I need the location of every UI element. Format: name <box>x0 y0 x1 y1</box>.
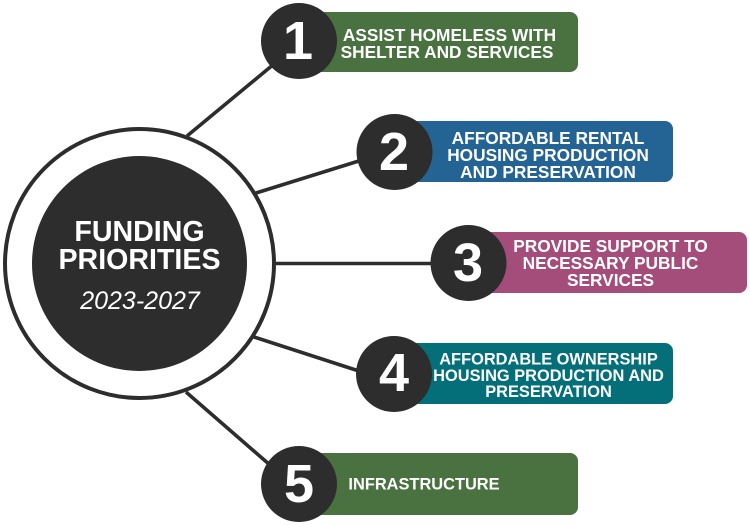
priority 2: AND PRESERVATION <box>460 162 636 182</box>
priority 4: PRESERVATION <box>485 383 612 401</box>
priority 3: PROVIDE SUPPORT TO <box>513 236 708 256</box>
central circle: funding priorities <box>5 129 274 398</box>
heading: funding priorities: FUNDING <box>74 216 205 248</box>
priority 1: 1 <box>283 11 313 71</box>
priority 1 <box>261 3 578 79</box>
connector lines <box>186 59 435 465</box>
priority 5 <box>261 446 578 522</box>
priority 5: INFRASTRUCTURE <box>348 476 500 494</box>
priority 1: ASSIST HOMELESS WITH <box>343 25 556 45</box>
priority 4: HOUSING PRODUCTION AND <box>433 367 664 385</box>
heading: funding priorities: PRIORITIES <box>58 244 221 276</box>
priority 3: SERVICES <box>567 270 654 290</box>
priority 2: AFFORDABLE RENTAL <box>452 128 645 148</box>
date range: 2023-2027 <box>79 287 201 315</box>
priority 4: AFFORDABLE OWNERSHIP <box>439 350 658 368</box>
priority 2: 2 <box>379 122 409 182</box>
priority 2: HOUSING PRODUCTION <box>447 145 649 165</box>
priority 5: 5 <box>284 454 314 514</box>
priority 3 <box>430 225 747 301</box>
priority 2 <box>356 114 673 190</box>
priority 4 <box>356 336 673 412</box>
priority 4: 4 <box>379 343 409 403</box>
priority 1: SHELTER AND SERVICES <box>341 42 553 62</box>
priority 3: NECESSARY PUBLIC <box>523 253 698 273</box>
priority 3: 3 <box>453 233 483 293</box>
